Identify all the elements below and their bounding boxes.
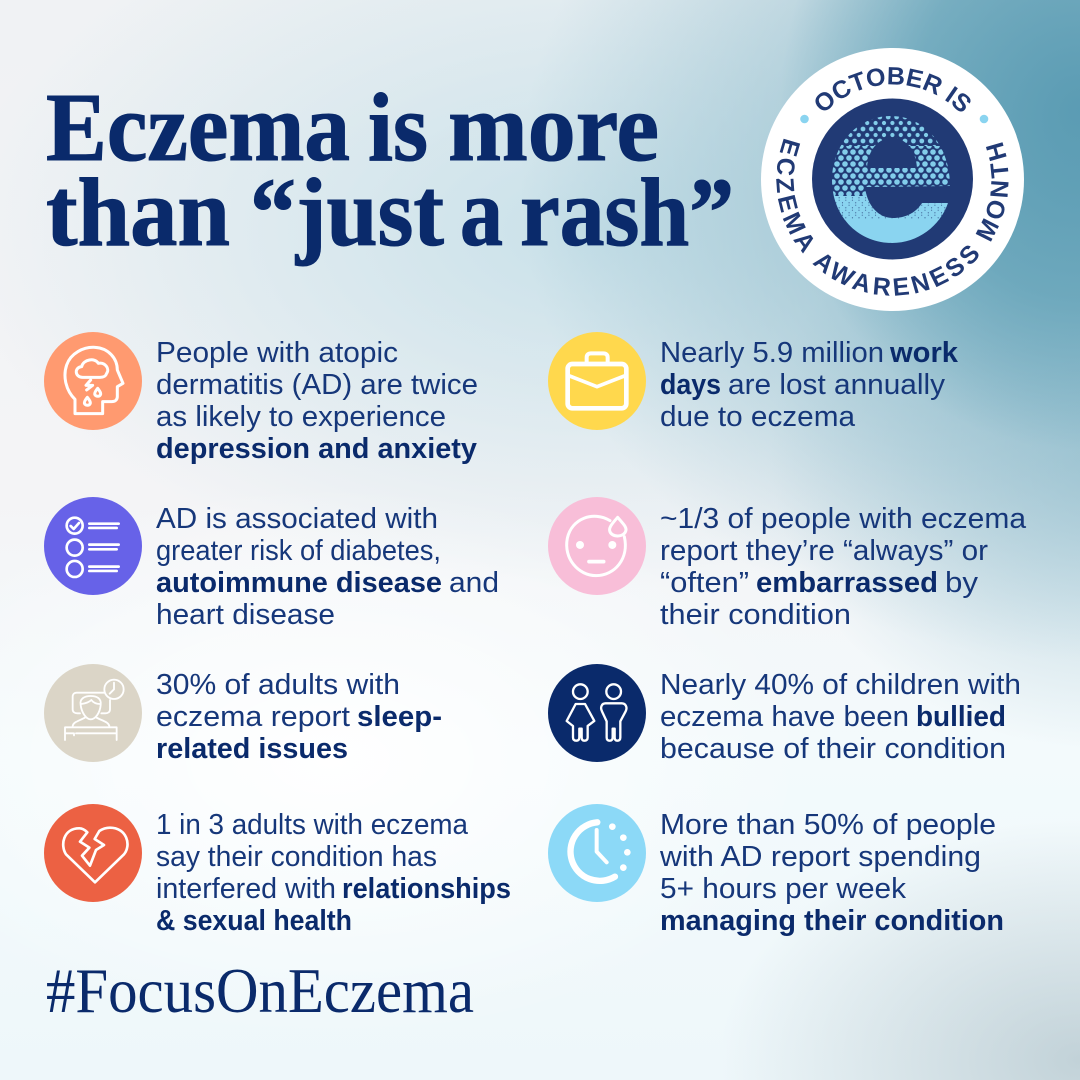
text: sleep issues: eczema report — [156, 701, 350, 733]
icon: checklist — [44, 497, 142, 595]
panel: time managing condition — [548, 804, 1004, 937]
title: is — [368, 74, 428, 182]
title: a — [460, 159, 503, 267]
text: bullying: because of their condition — [660, 733, 1006, 765]
text: work days: Nearly 5.9 million — [660, 337, 884, 369]
text: relationships: interfered with — [156, 873, 336, 905]
text: relationships — [156, 809, 511, 937]
text: depression and anxiety: depression and anxiety — [156, 433, 477, 465]
text: embarrassment: report they’re “always” or — [660, 535, 989, 567]
text: time managing condition: with AD report spending — [659, 841, 981, 873]
text: embarrassment: by — [945, 567, 979, 599]
text: diabetes and autoimmune: and — [449, 567, 499, 599]
title: Eczema — [46, 74, 350, 182]
text: depression and anxiety: as likely to experience — [156, 401, 446, 433]
text: depression and anxiety: People with atopic — [156, 337, 398, 369]
text: relationships: 1 in 3 adults with eczema — [156, 809, 468, 841]
title: “just — [250, 159, 444, 267]
panel: relationships — [44, 804, 511, 937]
badge: October is Eczema Awareness Month: OCTOBER IS — [815, 67, 970, 112]
text: work days: are lost annually — [728, 369, 946, 401]
panel: embarrassment — [548, 497, 1026, 631]
icon: broken heart — [44, 804, 142, 902]
panel: bullying — [548, 664, 1021, 765]
panel: depression and anxiety — [44, 332, 478, 465]
panel: diabetes and autoimmune — [44, 497, 499, 631]
text: work days: work — [889, 337, 958, 369]
text: sleep issues: 30% of adults with — [156, 669, 400, 701]
text: time managing condition: managing their condition — [660, 905, 1004, 937]
icon: person in bed with clock — [44, 664, 142, 762]
text: bullying: eczema have been — [660, 701, 909, 733]
hashtag: #FocusOnEczema — [46, 955, 474, 1026]
text: embarrassment: ~1/3 of people with eczema — [660, 503, 1026, 535]
text: diabetes and autoimmune: AD is associated with — [156, 503, 438, 535]
title: than — [46, 159, 230, 267]
text: embarrassment: “often” — [660, 567, 749, 599]
icon: briefcase — [548, 332, 646, 430]
text: diabetes and autoimmune — [156, 503, 499, 631]
text: time managing condition — [659, 809, 1004, 937]
text: work days: days — [660, 369, 721, 401]
text: sleep issues: related issues — [156, 733, 348, 765]
badge: October is Eczema Awareness Month: ECZEMA AWARENESS MONTH — [776, 138, 1008, 296]
panel: work days — [548, 332, 958, 433]
text: bullying: bullied — [916, 701, 1006, 733]
text: work days — [660, 337, 958, 433]
text: diabetes and autoimmune: greater risk of diabetes, — [156, 535, 441, 567]
text: relationships: relationships — [342, 873, 511, 905]
text: embarrassment: their condition — [660, 599, 851, 631]
text: time managing condition: 5+ hours per week — [660, 873, 907, 905]
text: relationships: & sexual health — [156, 905, 352, 937]
icon: head with storm cloud — [44, 332, 142, 430]
text: depression and anxiety — [156, 337, 478, 465]
badge: October is Eczema Awareness Month — [761, 48, 1024, 311]
text: sleep issues — [156, 669, 442, 765]
text: diabetes and autoimmune: autoimmune disease — [156, 567, 442, 599]
text: embarrassment — [660, 503, 1026, 631]
panel: sleep issues — [44, 664, 442, 765]
title: rash” — [520, 159, 734, 267]
text: bullying: Nearly 40% of children with — [660, 669, 1021, 701]
text: diabetes and autoimmune: heart disease — [156, 599, 335, 631]
title: more — [448, 74, 659, 182]
icon: clock with dots — [548, 804, 646, 902]
text: depression and anxiety: dermatitis (AD) are twice — [156, 369, 478, 401]
text: work days: due to eczema — [660, 401, 855, 433]
text: bullying — [660, 669, 1021, 765]
text: sleep issues: sleep- — [357, 701, 442, 733]
icon: two children — [548, 664, 646, 762]
icon: sweating face — [548, 497, 646, 595]
text: relationships: say their condition has — [156, 841, 437, 873]
text: time managing condition: More than 50% of people — [660, 809, 996, 841]
text: embarrassment: embarrassed — [756, 567, 938, 599]
title — [46, 74, 734, 267]
